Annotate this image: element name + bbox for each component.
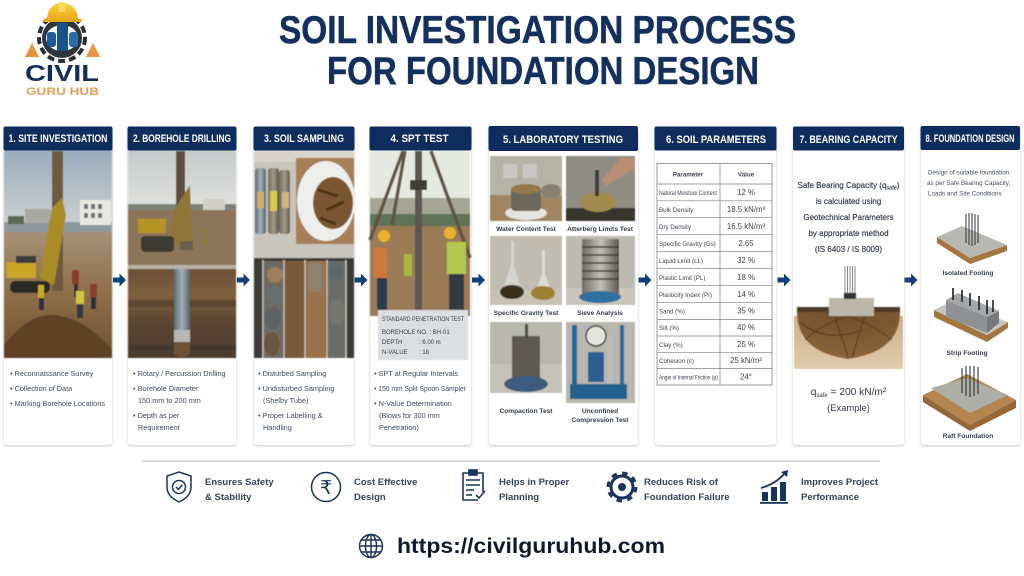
title	[279, 8, 796, 92]
photo: compaction test	[490, 322, 562, 393]
logo text: CIVIL	[25, 60, 99, 86]
caption: Compression Test	[571, 417, 629, 424]
callout: SPT data board	[382, 317, 464, 356]
text block: step 1 bullets: • Reconnaissance Survey	[10, 369, 94, 378]
benefit: planning	[463, 470, 570, 503]
panel: 3 soil sampling	[254, 126, 355, 445]
table: soil parameter values: 32 %	[737, 256, 755, 265]
heading: step 3: 3. SOIL SAMPLING	[264, 133, 344, 145]
text block: bearing capacity description: )	[897, 181, 900, 190]
icon: helmet	[43, 2, 82, 22]
text block: step 3 bullets: • Undisturbed Sampling	[258, 384, 334, 393]
caption: Raft Foundation	[943, 433, 993, 440]
callout: SPT data board: BOREHOLE NO. : BH-01	[382, 330, 450, 336]
text block: step 3 bullets: (Shelby Tube)	[263, 396, 308, 405]
table: soil parameter values: 18.5 kN/m³	[727, 205, 765, 214]
text block: step 3 bullets	[258, 369, 334, 432]
table: soil parameter values: 14 %	[737, 290, 755, 299]
table: soil parameter values: 18 %	[737, 273, 755, 282]
heading: step 6	[654, 126, 776, 150]
text block: step 3 bullets: • Proper Labelling &	[258, 411, 323, 420]
text block: foundation description: Design of suitable foundation	[928, 170, 1010, 176]
text block: step 3 bullets: Handling	[263, 423, 292, 432]
photo: sieve analysis	[566, 236, 635, 305]
callout: SPT data board: : 6.00 m	[419, 340, 441, 346]
text block: step 2 bullets: • Borehole Diameter	[133, 384, 199, 393]
text block: step 2 bullets	[133, 369, 226, 432]
caption: Water Content Test	[496, 226, 557, 233]
photo: specific gravity test	[490, 236, 562, 305]
benefit: risk	[608, 473, 730, 503]
text block: step 4 bullets	[374, 369, 467, 432]
table: soil parameter values: 12 %	[737, 188, 755, 197]
table: soil parameter values: Plasticity Index (PI)	[659, 292, 712, 299]
text block: step 2 bullets: Requirement	[138, 423, 180, 432]
panel: 1 site investigation	[4, 126, 112, 445]
heading: step 5: 5. LABORATORY TESTING	[503, 134, 623, 146]
text block: step 1 bullets: • Collection of Data	[10, 384, 73, 393]
formula: safe bearing capacity: safe	[816, 393, 828, 399]
text: Planning	[499, 492, 539, 503]
arrow	[354, 274, 368, 286]
benefit: performance	[760, 470, 879, 504]
caption: Unconfined	[582, 408, 618, 415]
heading: step 2: 2. BOREHOLE DRILLING	[133, 133, 231, 145]
table: soil parameter values: Silt (%)	[659, 325, 679, 332]
callout: SPT data board: DEPTH	[382, 340, 402, 346]
caption: Atterberg Limits Test	[567, 226, 634, 233]
table: soil parameter values: Clay (%)	[659, 342, 683, 349]
table: soil parameter values: Sand (%)	[659, 308, 685, 316]
text	[644, 477, 730, 503]
logo: Civil Guru Hub	[25, 2, 100, 98]
text block: bearing capacity description: Geotechnical Parameters	[803, 213, 894, 222]
text block: foundation description: as per Safe Bearing Capacity,	[927, 180, 1010, 187]
text: Design	[354, 492, 386, 503]
logo subtext: GURU HUB	[26, 86, 99, 98]
arrow	[113, 274, 126, 286]
panel: 6 soil parameters	[654, 126, 776, 445]
icon: globe	[360, 534, 382, 558]
callout: SPT data board: : 18	[419, 350, 430, 356]
heading: step 3	[254, 126, 354, 150]
text: Cost Effective	[354, 477, 417, 488]
table: soil parameter values: 40 %	[737, 323, 755, 332]
note: (Example)	[827, 402, 870, 413]
heading: step 1	[4, 126, 112, 150]
table: soil parameter values	[657, 164, 772, 385]
heading: step 7	[793, 126, 904, 150]
callout: SPT data board: STANDARD PENETRATION TEST	[382, 317, 464, 323]
text block: step 4 bullets: • SPT at Regular Intervals	[374, 369, 458, 378]
heading: step 8	[920, 126, 1020, 150]
table: soil parameter values: Value	[738, 172, 755, 178]
text block: step 4 bullets: (Blows for 300 mm	[379, 411, 440, 420]
text: Improves Project	[801, 477, 879, 488]
arrow	[778, 274, 790, 286]
caption: Specific Gravity Test	[494, 310, 559, 317]
caption: Sieve Analysis	[577, 310, 623, 317]
url text: https://civilguruhub.com	[397, 535, 665, 558]
heading: step 4	[370, 126, 472, 150]
caption: Compaction Test	[500, 408, 553, 415]
text block: step 4 bullets: Penetration)	[379, 423, 419, 432]
text block: bearing capacity description: (IS 6403 / IS 8009)	[815, 245, 882, 254]
icon: shield	[167, 472, 191, 502]
caption	[571, 408, 629, 424]
table: soil parameter values: Parameter	[673, 172, 704, 178]
benefit: safety	[167, 472, 274, 503]
icon: gear	[608, 473, 636, 501]
icon: rupee: ₹	[320, 477, 332, 499]
photo: unconfined compression test	[566, 322, 635, 403]
website link	[360, 534, 665, 558]
text: Ensures Safety	[205, 477, 274, 488]
text block: step 4 bullets: • 150 mm Split Spoon Sampler	[374, 384, 467, 393]
table: soil parameter values: Dry Density	[659, 224, 692, 231]
text block: step 2 bullets: • Depth as per	[133, 411, 180, 420]
caption: Isolated Footing	[943, 270, 993, 277]
icon: cones	[25, 43, 100, 57]
text block: step 2 bullets: 150 mm to 200 mm	[138, 396, 201, 405]
table: soil parameter values: 2.65	[738, 239, 754, 248]
heading: step 5	[488, 126, 638, 151]
diagram: strip footing	[934, 288, 1008, 342]
diagram: raft foundation	[923, 366, 1016, 431]
heading: step 4: 4. SPT TEST	[390, 133, 449, 145]
title: FOR FOUNDATION DESIGN	[327, 49, 759, 92]
table: soil parameter values: 35 %	[737, 306, 755, 316]
heading: step 1: 1. SITE INVESTIGATION	[8, 133, 108, 145]
photo: drilling rig on site	[4, 150, 112, 358]
text block: step 2 bullets: • Rotary / Percussion Drilling	[133, 369, 226, 378]
table: soil parameter values: Natural Moisture Content	[659, 190, 717, 197]
table: soil parameter values: 25 %	[737, 340, 755, 349]
table: soil parameter values: Bulk Density	[659, 207, 694, 214]
caption: Strip Footing	[946, 350, 988, 357]
text block: bearing capacity description: Safe Bearing Capacity (q	[797, 181, 886, 190]
table: soil parameter values: Specific Gravity (Gs)	[659, 241, 716, 248]
panel: 4 SPT test	[370, 126, 472, 445]
table: soil parameter values: 25 kN/m²	[730, 356, 762, 365]
title: SOIL INVESTIGATION PROCESS	[279, 8, 796, 51]
icon: clipboard	[463, 470, 485, 500]
text: Performance	[801, 492, 859, 503]
icon: gear and buildings	[39, 15, 85, 61]
table: soil parameter values: Plastic Limit (PL)	[659, 275, 705, 282]
photo: Atterberg limits test	[566, 156, 635, 221]
text block: foundation description	[927, 170, 1010, 198]
text block: step 1 bullets: • Marking Borehole Locations	[10, 399, 105, 408]
text block: bearing capacity description: by appropriate method	[808, 229, 889, 238]
text block: foundation description: Loads and Site Conditions	[928, 190, 1002, 198]
text block: step 3 bullets: • Disturbed Sampling	[258, 369, 326, 378]
table: soil parameter values: 16.5 kN/m³	[727, 222, 765, 231]
text block: bearing capacity description: safe	[886, 186, 897, 192]
panel: 2 borehole drilling	[128, 126, 236, 445]
arrow	[904, 274, 918, 286]
callout: SPT data board: N-VALUE	[382, 350, 408, 356]
icon: growth chart	[760, 470, 788, 504]
text block: bearing capacity description	[797, 181, 900, 254]
diagram: isolated footing	[937, 213, 1007, 264]
text: & Stability	[205, 492, 252, 503]
panel: 5 laboratory testing	[488, 126, 638, 445]
text: Foundation Failure	[644, 492, 730, 503]
text	[499, 477, 570, 503]
arrow	[237, 274, 250, 286]
heading: step 7: 7. BEARING CAPACITY	[800, 134, 898, 146]
text block: bearing capacity description: is calculated using	[816, 197, 881, 206]
table: soil parameter values: Cohesion (c)	[659, 358, 694, 365]
panel: 7 bearing capacity	[793, 126, 904, 445]
photo: SPT tripod and crew	[370, 151, 470, 360]
heading: step 6: 6. SOIL PARAMETERS	[666, 134, 766, 146]
formula: safe bearing capacity: = 200 kN/m²	[828, 387, 887, 398]
diagram: footing on soil with failure zone	[794, 266, 903, 369]
text	[354, 477, 417, 503]
panel: 8 foundation design	[920, 126, 1020, 445]
text block: step 1 bullets	[10, 369, 105, 408]
photo: water content test	[490, 156, 562, 221]
text: Reduces Risk of	[644, 477, 719, 488]
text	[801, 477, 879, 503]
table: soil parameter values: Liquid Limit (LL)	[659, 258, 703, 265]
arrow	[472, 274, 485, 286]
table: soil parameter values: Angle of Internal Friction (φ)	[659, 374, 718, 382]
text block: step 4 bullets: • N-Value Determination	[374, 399, 452, 408]
photo: rig and borehole	[128, 150, 236, 358]
text	[205, 477, 274, 503]
table: soil parameter values: 24°	[740, 372, 752, 382]
heading: step 2	[128, 126, 236, 150]
arrow	[638, 274, 652, 286]
benefit: cost	[312, 472, 417, 503]
formula: safe bearing capacity: q	[811, 387, 816, 398]
text: Helps in Proper	[499, 477, 570, 488]
photo: sampling tubes, bag and core box	[254, 150, 355, 358]
